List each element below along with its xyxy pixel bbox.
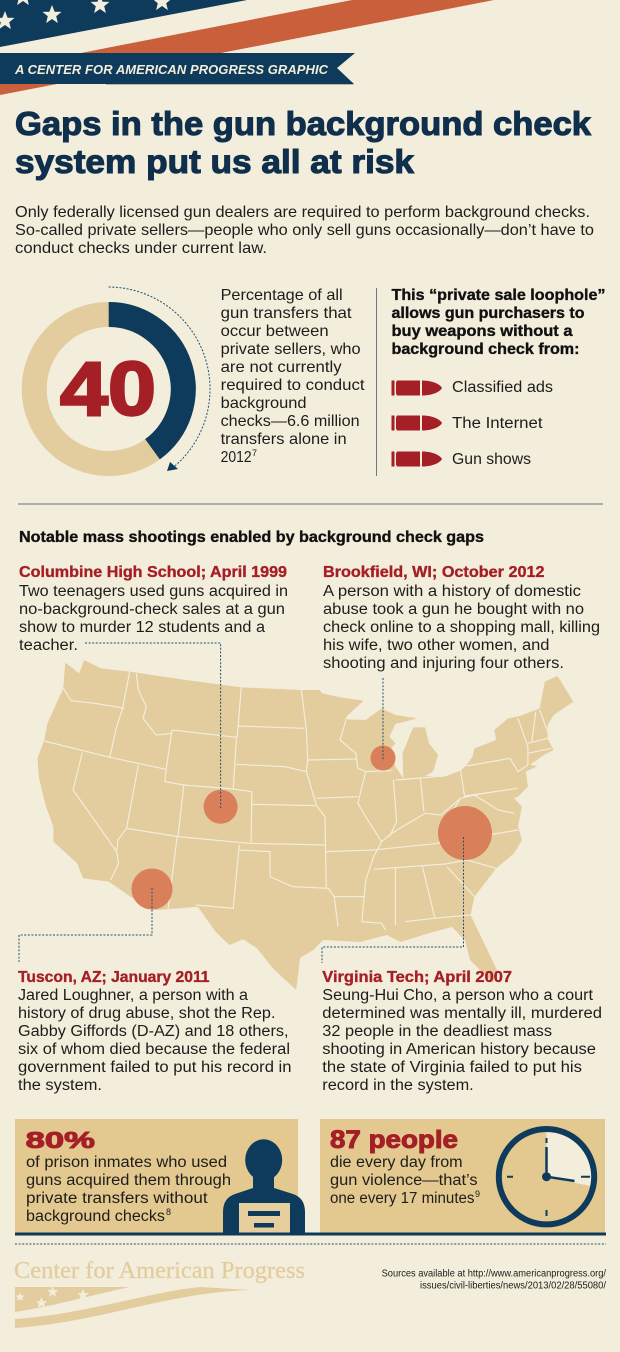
vertical divider [376,288,378,476]
logo: Center for American Progress: Center for American Progress [14,1258,305,1284]
list: gun shows: Gun shows [452,451,531,468]
donut chart: 40 percent [34,287,210,471]
callout: Tucson: Tuscon, AZ; January 2011 [18,969,210,986]
donut description: private sellers, who [221,341,361,358]
logo: Center for American Progress [14,1258,305,1328]
donut description: 7 [252,448,257,458]
marker: Tucson [132,868,172,910]
callout: Virginia Tech: Virginia Tech; April 2007 [322,969,512,986]
icon: person holding placard [223,1139,305,1234]
callout: Tucson: government failed to put his record in [18,1059,292,1076]
marker: Brookfield [370,746,396,770]
banner ribbon: A CENTER FOR AMERICAN PROGRESS GRAPHIC [14,62,329,77]
map of the United States [38,660,573,990]
intro text: So-called private sellers—people who only sell guns occasionally—don’t have to [15,222,594,239]
callout: Virginia Tech: 32 people in the deadliest mass [322,1023,552,1040]
stat description: one every 17 minutes [330,1190,475,1207]
donut chart: 40 percent: 40 [60,347,156,432]
flag header decoration [0,0,494,95]
stat: 87 people: 87 people [330,1126,458,1154]
stat description: gun violence—that’s [330,1172,478,1189]
callout: Virginia Tech: the state of Virginia failed to put his [322,1059,582,1076]
donut description [221,287,365,466]
leader line: Virginia Tech [322,837,464,963]
icon: clock [499,1129,594,1224]
sources note: Sources available at http://www.americanprogress.org/ [382,1269,606,1280]
donut description: 2012 [221,449,252,466]
list: the internet [392,415,543,432]
stat description: die every day from [330,1154,463,1171]
stat description: private transfers without [26,1190,208,1207]
callout: Brookfield: check online to a shopping mall, killing [323,619,600,636]
callout: Virginia Tech [322,969,602,1094]
stat: 80%: 80% [26,1127,95,1153]
callout: Columbine: teacher. [19,637,78,654]
callout: Tucson: Jared Loughner, a person with a [18,987,248,1004]
donut description: are not currently [221,359,342,376]
leader line: Brookfield [382,678,384,761]
stat description: guns acquired them through [26,1172,231,1189]
stat description: 9 [475,1189,480,1199]
stat description [330,1154,480,1207]
callout: Tucson: Gabby Giffords (D-AZ) and 18 others, [18,1023,288,1040]
panel: 87 people [320,1119,605,1233]
stat description: of prison inmates who used [26,1154,227,1171]
callout: Brookfield: abuse took a gun he bought with no [323,601,584,618]
marker: Virginia Tech [438,806,492,860]
sources note [382,1269,606,1292]
loophole heading: allows gun purchasers to [392,305,584,322]
callout: Columbine: no-background-check sales at a gun [19,601,285,618]
callout: Columbine: Columbine High School; April 1999 [19,564,287,581]
callout: Columbine: Two teenagers used guns acquired in [19,583,288,600]
list: classified ads: Classified ads [452,379,553,396]
callout: Virginia Tech: determined was mentally ill, murdered [322,1005,602,1022]
callout: Tucson [18,969,292,1094]
callout: Tucson: history of drug abuse, shot the Rep. [18,1005,276,1022]
intro text: Only federally licensed gun dealers are required to perform background checks. [15,204,590,221]
marker: Columbine [204,790,238,824]
callout: Brookfield: A person with a history of domestic [323,583,581,600]
donut description: Percentage of all [221,287,343,304]
donut description: transfers alone in [221,431,347,448]
donut description: gun transfers that [221,305,352,322]
callout: Brookfield: his wife, two other women, and [323,637,550,654]
stat description: 8 [166,1207,171,1217]
title: system put us all at risk [15,143,415,180]
intro text: conduct checks under current law. [15,240,267,257]
intro text [15,204,594,257]
title [15,105,592,180]
callout: Brookfield: Brookfield, WI; October 2012 [323,564,544,581]
loophole heading: buy weapons without a [392,323,573,340]
callout: Tucson: six of whom died because the federal [18,1041,290,1058]
stat description: background checks [26,1208,165,1225]
loophole heading [392,287,606,358]
leader line: Tucson [19,888,152,962]
leader line: Columbine [85,643,221,808]
stat description [26,1154,231,1225]
callout: Brookfield: shooting and injuring four others. [323,655,564,672]
callout: Virginia Tech: record in the system. [322,1077,474,1094]
donut description: occur between [221,323,329,340]
donut description: background [221,395,307,412]
loophole heading: This “private sale loophole” [392,287,606,304]
donut description: checks—6.6 million [221,413,360,430]
callout: Columbine: show to murder 12 students and a [19,619,265,636]
callout: Tucson: the system. [18,1077,102,1094]
donut description: required to conduct [221,377,365,394]
list: classified ads [392,379,553,396]
list: gun shows [392,451,531,468]
list: the internet: The Internet [452,415,543,432]
banner ribbon [0,53,355,85]
section heading: Notable mass shootings enabled by background check gaps [19,529,484,546]
callout: Virginia Tech: Seung-Hui Cho, a person who a court [322,987,594,1004]
loophole heading: background check from: [392,341,580,358]
sources note: issues/civil-liberties/news/2013/02/28/55080/ [420,1280,606,1292]
title: Gaps in the gun background check [15,105,592,142]
callout: Brookfield [323,564,600,672]
callout: Virginia Tech: shooting in American history because [322,1041,596,1058]
callout: Columbine [19,564,288,654]
panel: 80 percent of inmates [15,1119,305,1234]
